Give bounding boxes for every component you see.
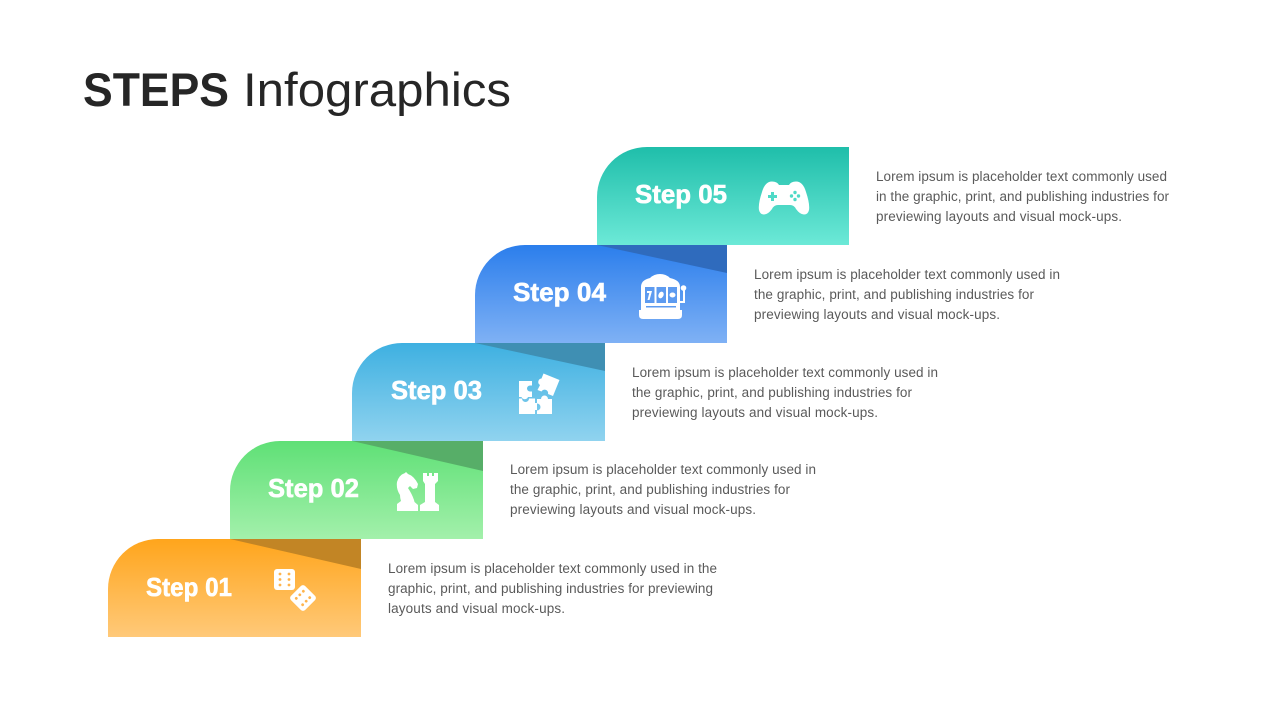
- step 05 description: previewing layouts and visual mock-ups.: [876, 209, 1122, 224]
- step 05 label: Step 05: [635, 179, 727, 209]
- icon: puzzle pieces: [519, 374, 560, 414]
- step 01 shadow: [230, 539, 361, 569]
- step 01 label: Step 01: [146, 572, 232, 602]
- icon: chess pieces: [397, 472, 439, 511]
- step 04 description: previewing layouts and visual mock-ups.: [754, 307, 1000, 322]
- step 03 description: [632, 365, 938, 420]
- step 02 description: previewing layouts and visual mock-ups.: [510, 502, 756, 517]
- step 02 block: [230, 441, 483, 539]
- panel: step 04: [475, 245, 727, 343]
- step 03 shadow: [475, 343, 605, 371]
- icon: slot machine: [639, 274, 686, 319]
- title: STEPS: [83, 63, 229, 116]
- panel: step 01: [108, 539, 361, 637]
- step 03 description: Lorem ipsum is placeholder text commonly used in: [632, 365, 938, 380]
- step 01 block: [108, 539, 361, 637]
- step 05 block: [597, 147, 849, 245]
- step 02 label: Step 02: [268, 473, 359, 503]
- step 02 description: the graphic, print, and publishing industries for: [510, 482, 790, 497]
- step 03 label: Step 03: [391, 375, 482, 405]
- step 04 label: Step 04: [513, 277, 607, 307]
- icon: game controller: [759, 182, 809, 214]
- title: Infographics: [243, 63, 511, 116]
- step 05 description: Lorem ipsum is placeholder text commonly used: [876, 169, 1167, 184]
- panel: step 02: [230, 441, 483, 539]
- step 02 shadow: [352, 441, 483, 471]
- step 04 description: Lorem ipsum is placeholder text commonly used in: [754, 267, 1060, 282]
- step 01 description: [388, 561, 717, 616]
- panel: step 03: [352, 343, 605, 441]
- step 04 shadow: [597, 245, 727, 273]
- icon: dice: [274, 569, 317, 612]
- step 03 block: [352, 343, 605, 441]
- step 04 block: [475, 245, 727, 343]
- step 05 description: [876, 169, 1170, 224]
- step 01 description: layouts and visual mock-ups.: [388, 601, 565, 616]
- step 03 description: previewing layouts and visual mock-ups.: [632, 405, 878, 420]
- panel: step 05: [597, 147, 849, 245]
- step 02 description: [510, 462, 816, 517]
- step 05 description: in the graphic, print, and publishing industries for: [876, 189, 1170, 204]
- step 01 description: graphic, print, and publishing industries for previewing: [388, 581, 713, 596]
- step 02 description: Lorem ipsum is placeholder text commonly used in: [510, 462, 816, 477]
- step 04 description: the graphic, print, and publishing industries for: [754, 287, 1034, 302]
- step 03 description: the graphic, print, and publishing industries for: [632, 385, 912, 400]
- step 04 description: [754, 267, 1060, 322]
- step 01 description: Lorem ipsum is placeholder text commonly used in the: [388, 561, 717, 576]
